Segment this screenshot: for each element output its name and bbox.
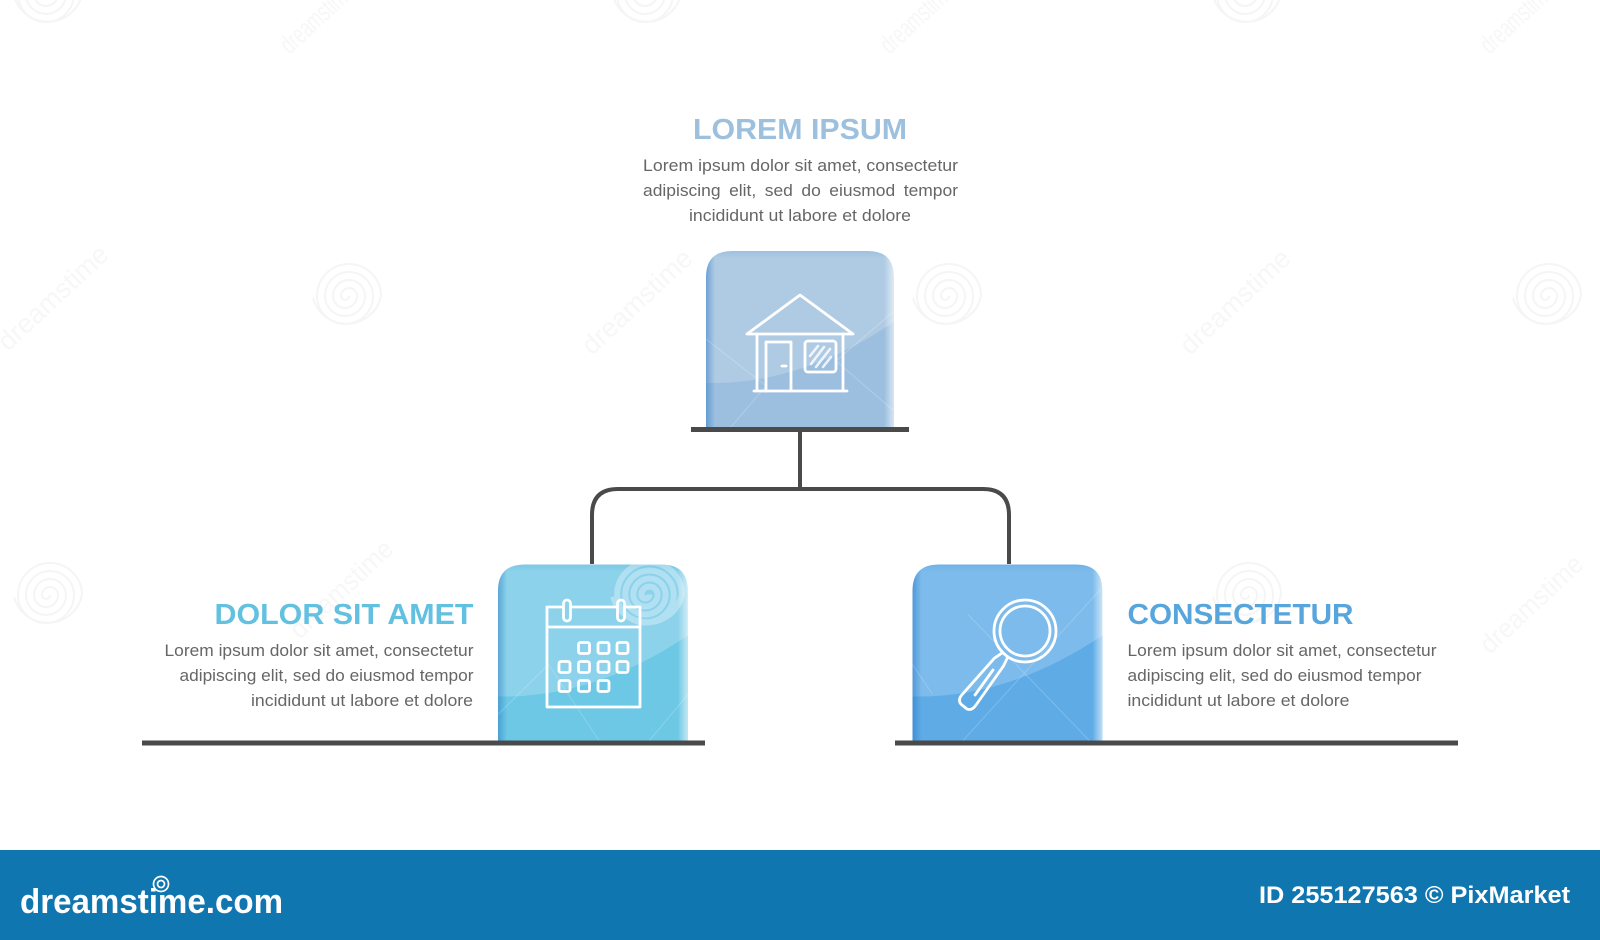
text block: dolor sit amet description: adipiscing elit, sed do eiusmod tempor	[180, 667, 474, 685]
text block: consectetur description: incididunt ut labore et dolore	[1128, 692, 1350, 710]
icon: calendar	[547, 600, 640, 707]
base bar	[142, 740, 705, 746]
logo text: dreamstime.com	[20, 883, 283, 921]
infographic: dreamstime	[1474, 549, 1589, 659]
text block: dolor sit amet description: incididunt ut labore et dolore	[251, 692, 473, 710]
infographic: dreamstime	[284, 534, 399, 644]
tile: house	[706, 251, 894, 427]
image id credit: ID 255127563 © PixMarket	[1259, 882, 1570, 909]
tile: magnifier	[912, 564, 1102, 740]
icon: magnifier	[959, 600, 1056, 710]
tile: calendar	[498, 562, 688, 740]
heading: dolor sit amet: DOLOR SIT AMET	[214, 599, 474, 631]
text block: consectetur description: adipiscing elit, sed do eiusmod tempor	[1128, 667, 1422, 685]
infographic: dreamstime	[1174, 243, 1296, 360]
base bar	[895, 740, 1458, 746]
icon: logo spiral	[154, 876, 168, 892]
connector lines	[592, 432, 1009, 564]
infographic: dreamstime	[576, 243, 698, 360]
text block: dolor sit amet description	[164, 642, 474, 710]
panel: dolor sit amet	[142, 562, 705, 746]
heading: lorem ipsum: LOREM IPSUM	[693, 114, 907, 146]
text block: lorem ipsum description: Lorem ipsum dolor sit amet, consectetur	[643, 157, 959, 175]
icon: house	[747, 295, 853, 391]
panel: consectetur	[895, 564, 1458, 746]
text block: lorem ipsum description: incididunt ut labore et dolore	[689, 207, 911, 225]
text block: consectetur description: Lorem ipsum dolor sit amet, consectetur	[1128, 642, 1437, 660]
text block: consectetur description	[1128, 642, 1437, 710]
text block: lorem ipsum description	[643, 157, 959, 225]
text block: lorem ipsum description: adipiscing elit, sed do eiusmod tempor	[643, 182, 959, 200]
heading: consectetur: CONSECTETUR	[1128, 599, 1354, 631]
panel: lorem ipsum	[643, 114, 959, 432]
base bar	[691, 427, 909, 432]
text block: dolor sit amet description: Lorem ipsum dolor sit amet, consectetur	[164, 642, 474, 660]
footer banner	[0, 850, 1600, 940]
